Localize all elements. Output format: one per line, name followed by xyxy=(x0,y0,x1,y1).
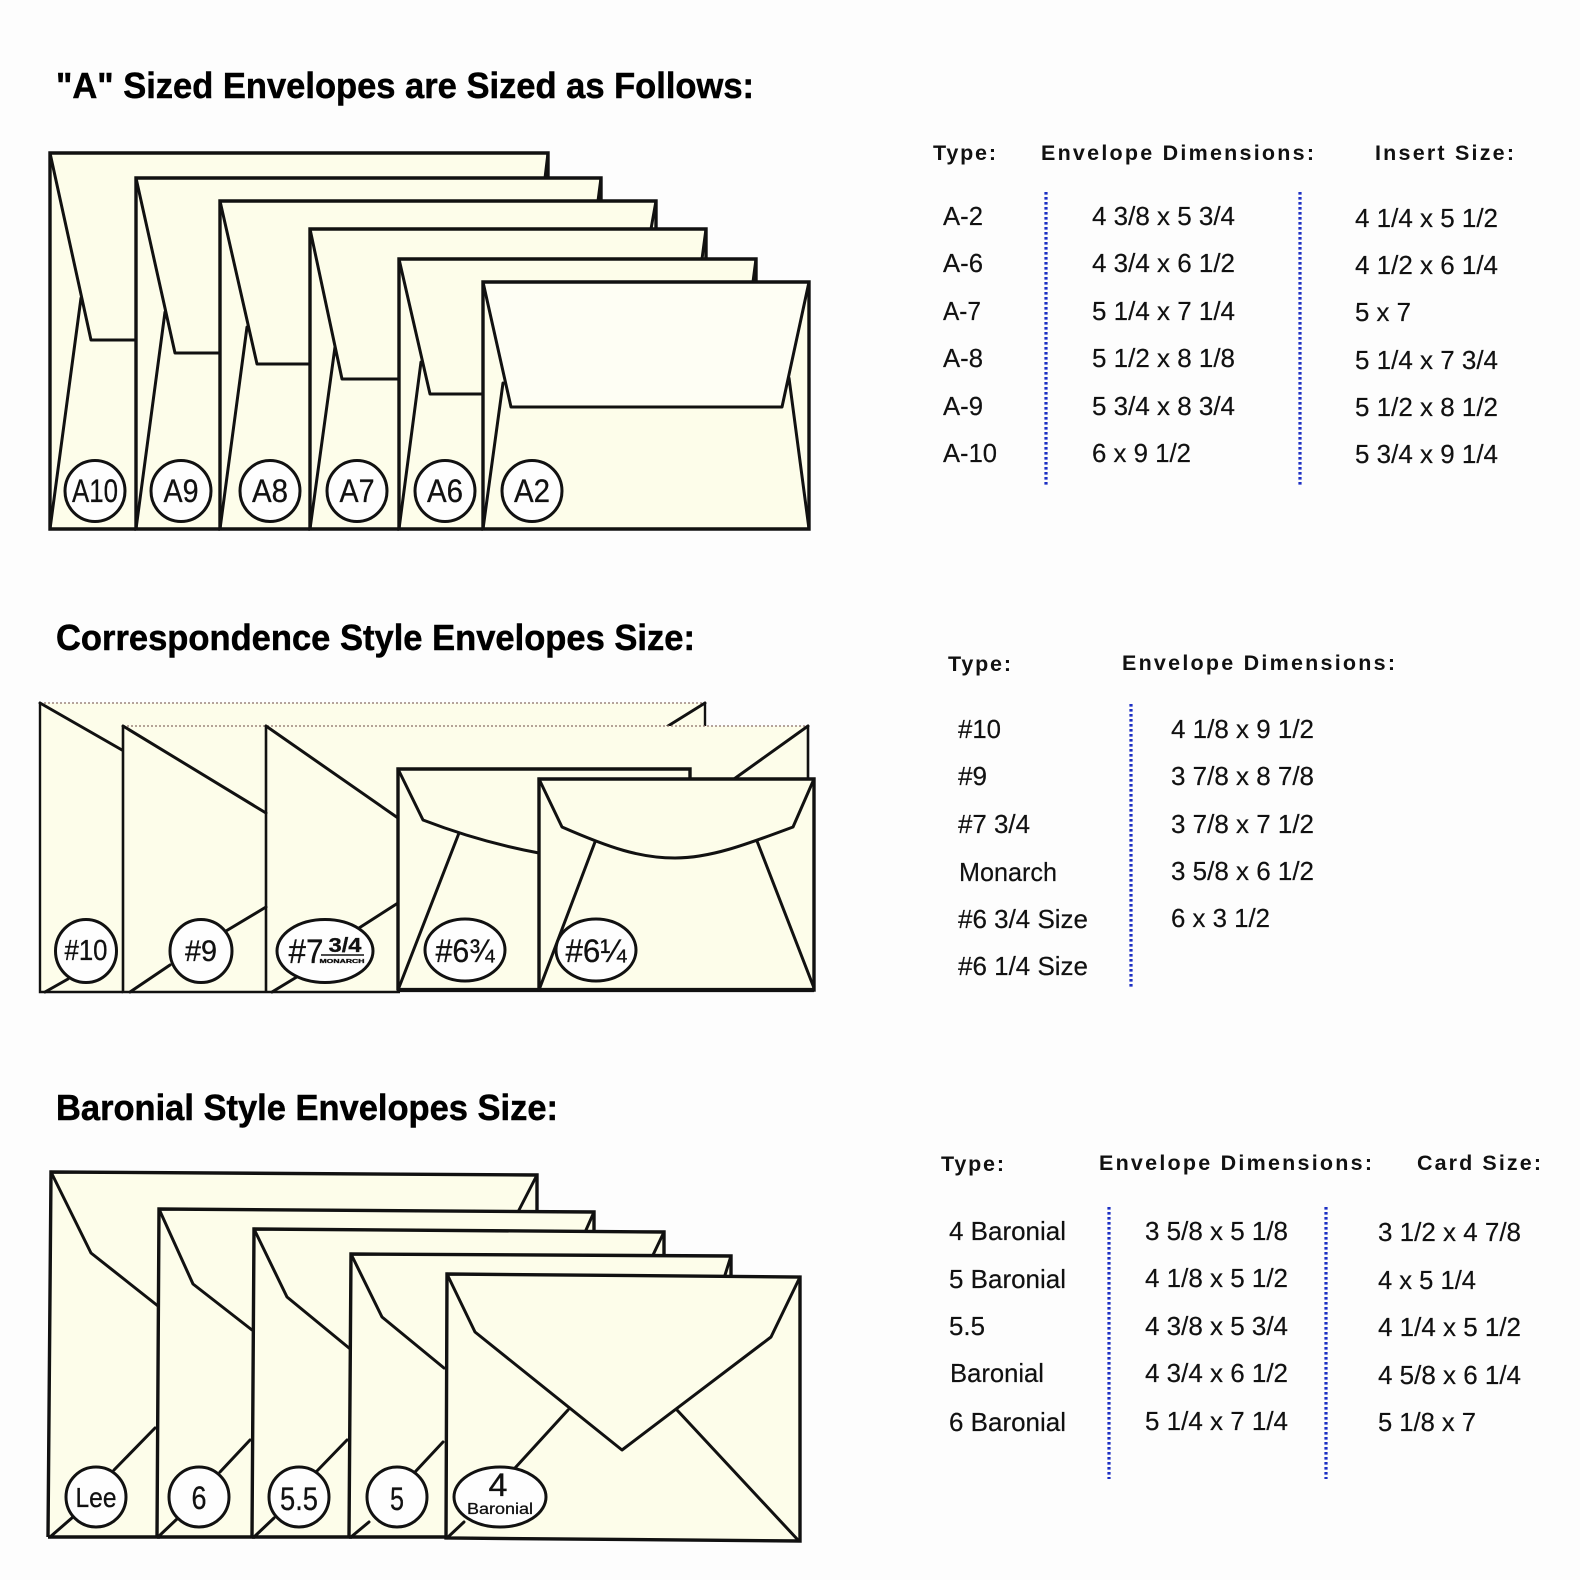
panel: A sized envelopes xyxy=(50,65,1514,529)
envelope: #10 xyxy=(40,703,705,992)
table: A sized dimensions: 6 x 9 1/2 xyxy=(1092,438,1191,468)
table: baronial dimensions: 4 Baronial xyxy=(949,1216,1066,1246)
badge: A6: A6 xyxy=(427,473,463,509)
illustration: nested correspondence envelopes xyxy=(40,703,814,992)
badge: 5: 5 xyxy=(390,1481,404,1517)
badge: A8 xyxy=(240,460,300,522)
table: A sized dimensions: 4 1/2 x 6 1/4 xyxy=(1355,250,1498,280)
table: A sized dimensions: 5 1/4 x 7 3/4 xyxy=(1355,345,1498,375)
table: baronial dimensions: 4 3/4 x 6 1/2 xyxy=(1145,1358,1288,1388)
badge: #7 3/4 Monarch: MONARCH xyxy=(320,959,365,965)
table: A sized dimensions: 5 3/4 x 9 1/4 xyxy=(1355,439,1498,469)
table: A sized dimensions: A-2 xyxy=(943,201,983,231)
badge: 6: 6 xyxy=(192,1480,206,1516)
table: baronial dimensions: Baronial xyxy=(950,1358,1044,1388)
table: baronial dimensions: 6 Baronial xyxy=(949,1407,1066,1437)
badge: #6 1/4 xyxy=(556,919,636,981)
table: A sized dimensions: A-10 xyxy=(943,438,997,468)
heading: correspondence: Correspondence Style Envelopes Size: xyxy=(56,617,695,658)
badge: A9: A9 xyxy=(164,473,198,509)
badge: #6 3/4: #6¾ xyxy=(436,933,496,969)
table: baronial dimensions: 3 1/2 x 4 7/8 xyxy=(1378,1217,1521,1247)
table: baronial dimensions xyxy=(941,1151,1541,1479)
table: correspondence dimensions: 3 7/8 x 8 7/8 xyxy=(1171,761,1314,791)
badge: 5.5: 5.5 xyxy=(280,1481,318,1517)
badge: #6 3/4 xyxy=(425,919,505,981)
table: A sized dimensions: 5 x 7 xyxy=(1355,297,1411,327)
badge: 4 Baronial: Baronial xyxy=(467,1501,533,1518)
badge: 5 xyxy=(367,1467,427,1527)
table: correspondence dimensions: #6 1/4 Size xyxy=(958,951,1088,981)
envelope: #6 3/4 xyxy=(398,769,690,990)
table: correspondence dimensions: #10 xyxy=(958,714,1001,744)
table: baronial dimensions: 5 1/4 x 7 1/4 xyxy=(1145,1406,1288,1436)
envelope: A10 xyxy=(50,153,548,529)
table: A sized dimensions: A-6 xyxy=(943,248,983,278)
badge: 6 xyxy=(169,1467,229,1527)
panel: correspondence style envelopes xyxy=(40,617,1395,992)
illustration: nested baronial envelopes xyxy=(48,1172,800,1541)
table: baronial dimensions: 4 x 5 1/4 xyxy=(1378,1265,1476,1295)
envelope: A6 xyxy=(399,259,756,529)
panel: baronial style envelopes xyxy=(48,1087,1541,1541)
table: correspondence dimensions: 3 5/8 x 6 1/2 xyxy=(1171,856,1314,886)
badge: #6 1/4: #6¼ xyxy=(566,933,628,969)
badge: A10 xyxy=(65,460,125,522)
table: A sized dimensions: 5 1/4 x 7 1/4 xyxy=(1092,296,1235,326)
badge: #7 3/4 Monarch xyxy=(277,920,373,982)
badge: #7 3/4 Monarch: 3/4 xyxy=(328,935,363,957)
badge: #10 xyxy=(56,920,116,982)
table: baronial dimensions: Type: xyxy=(941,1152,1004,1176)
table: A sized dimensions: Type: xyxy=(933,141,996,165)
badge: A2: A2 xyxy=(514,473,550,509)
badge: 4 Baronial xyxy=(454,1467,546,1527)
heading: baronial: Baronial Style Envelopes Size: xyxy=(56,1087,558,1128)
table: A sized dimensions: A-9 xyxy=(943,391,983,421)
badge: #7 3/4 Monarch: #7 xyxy=(288,933,324,971)
envelope: 6 xyxy=(157,1209,594,1537)
badge: A8: A8 xyxy=(252,473,288,509)
envelope: A8 xyxy=(220,201,656,529)
table: correspondence dimensions xyxy=(948,651,1395,989)
table: A sized dimensions: 5 1/2 x 8 1/2 xyxy=(1355,392,1498,422)
table: correspondence dimensions: Type: xyxy=(948,652,1011,676)
envelope: 5 xyxy=(349,1254,731,1537)
envelope: 5.5 xyxy=(252,1229,664,1537)
table: correspondence dimensions: #9 xyxy=(958,761,987,791)
table: baronial dimensions: 5.5 xyxy=(949,1311,985,1341)
badge: Lee: Lee xyxy=(76,1482,116,1513)
table: correspondence dimensions: 4 1/8 x 9 1/2 xyxy=(1171,714,1314,744)
heading: A sized: "A" Sized Envelopes are Sized as Follows: xyxy=(56,65,754,106)
table: A sized dimensions: Insert Size: xyxy=(1375,141,1514,165)
table: baronial dimensions: 4 1/8 x 5 1/2 xyxy=(1145,1263,1288,1293)
table: A sized dimensions: A-7 xyxy=(943,296,981,326)
table: baronial dimensions: 4 3/8 x 5 3/4 xyxy=(1145,1311,1288,1341)
badge: A6 xyxy=(415,460,475,522)
envelope: Lee xyxy=(48,1172,537,1537)
table: A sized dimensions: 5 1/2 x 8 1/8 xyxy=(1092,343,1235,373)
table: A sized dimensions: 4 3/4 x 6 1/2 xyxy=(1092,248,1235,278)
table: A sized dimensions: A-8 xyxy=(943,343,983,373)
badge: #9: #9 xyxy=(185,935,217,968)
table: correspondence dimensions: 3 7/8 x 7 1/2 xyxy=(1171,809,1314,839)
table: baronial dimensions: Card Size: xyxy=(1417,1151,1541,1175)
envelope: 4 Baronial xyxy=(446,1274,800,1541)
table: baronial dimensions: 3 5/8 x 5 1/8 xyxy=(1145,1216,1288,1246)
badge: #10: #10 xyxy=(64,935,108,967)
table: baronial dimensions: Envelope Dimensions: xyxy=(1099,1151,1372,1175)
table: baronial dimensions: 5 Baronial xyxy=(949,1264,1066,1294)
badge: A10: A10 xyxy=(72,473,118,509)
table: A sized dimensions: Envelope Dimensions: xyxy=(1041,141,1314,165)
badge: A2 xyxy=(502,460,562,522)
badge: #9 xyxy=(170,920,232,982)
badge: 5.5 xyxy=(269,1467,329,1527)
table: correspondence dimensions: 6 x 3 1/2 xyxy=(1171,903,1270,933)
envelope: #6 1/4 xyxy=(398,779,814,990)
table: correspondence dimensions: #6 3/4 Size xyxy=(958,904,1088,934)
badge: A9 xyxy=(151,460,211,522)
table: A sized dimensions xyxy=(933,141,1514,487)
badge: Lee xyxy=(66,1467,126,1527)
illustration: nested A envelopes xyxy=(50,153,809,529)
table: baronial dimensions: 4 5/8 x 6 1/4 xyxy=(1378,1360,1521,1390)
envelope: A7 xyxy=(310,229,706,529)
envelope: A9 xyxy=(136,178,601,529)
table: baronial dimensions: 4 1/4 x 5 1/2 xyxy=(1378,1312,1521,1342)
table: correspondence dimensions: Monarch xyxy=(959,857,1057,887)
table: correspondence dimensions: Envelope Dimensions: xyxy=(1122,651,1395,675)
badge: A7: A7 xyxy=(340,473,374,509)
table: correspondence dimensions: #7 3/4 xyxy=(958,809,1030,839)
badge: A7 xyxy=(327,460,387,522)
table: baronial dimensions: 5 1/8 x 7 xyxy=(1378,1407,1476,1437)
table: A sized dimensions: 5 3/4 x 8 3/4 xyxy=(1092,391,1235,421)
table: A sized dimensions: 4 1/4 x 5 1/2 xyxy=(1355,203,1498,233)
envelope: A2 xyxy=(483,282,809,529)
envelope: #9 and #7 3/4 xyxy=(123,726,808,992)
table: A sized dimensions: 4 3/8 x 5 3/4 xyxy=(1092,201,1235,231)
badge: 4 Baronial: 4 xyxy=(488,1467,508,1503)
